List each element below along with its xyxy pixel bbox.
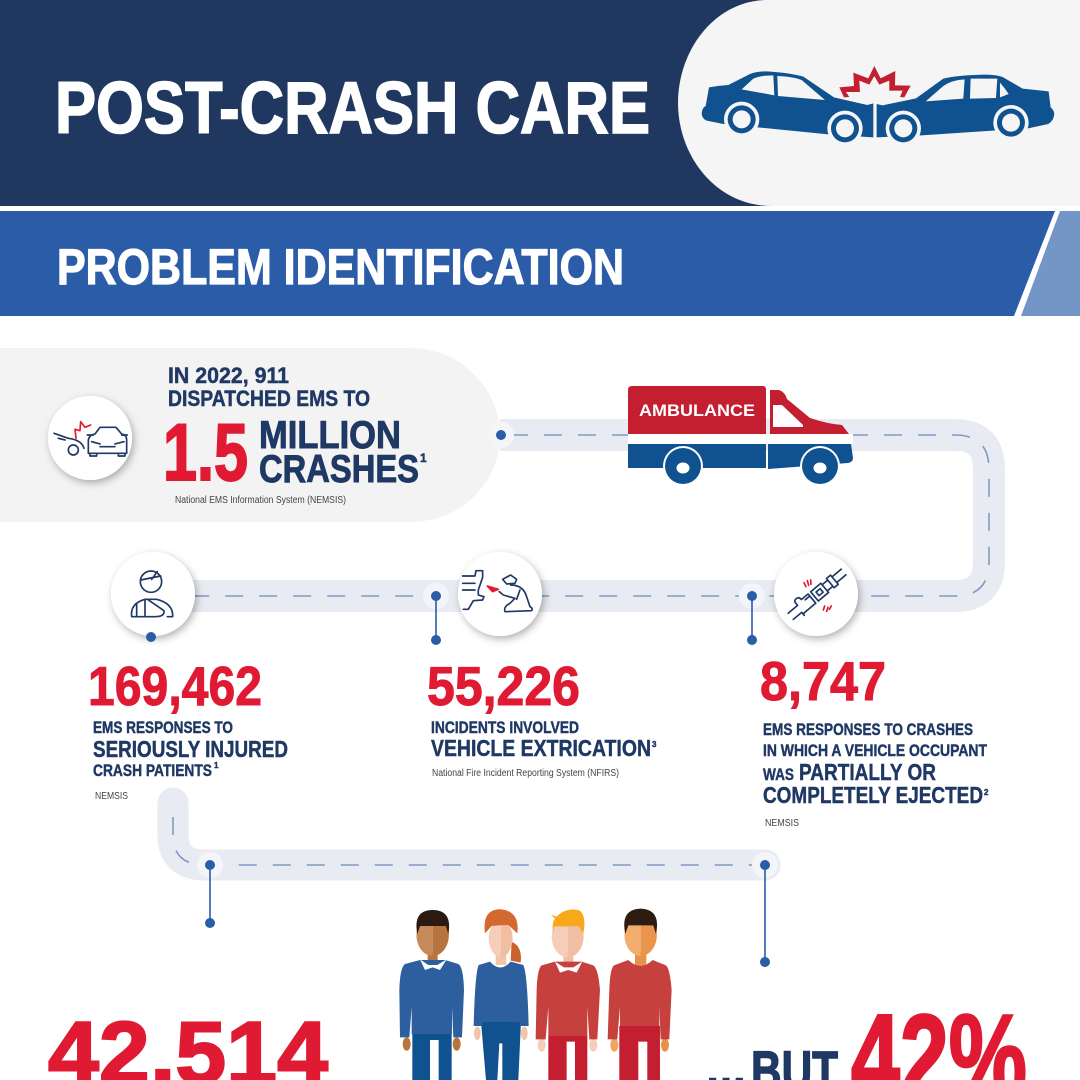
million crashes: CRASHES	[259, 448, 419, 491]
stat: seriously injured: 1	[214, 761, 219, 770]
stat: seriously injured: NEMSIS	[95, 791, 128, 802]
stat: ejected occupants: NEMSIS	[765, 818, 799, 829]
section banner	[0, 211, 1080, 316]
road path lower	[173, 803, 765, 865]
icon: injured person	[111, 552, 195, 636]
stat: vehicle extrication	[427, 655, 657, 779]
title: POST-CRASH CARE	[55, 68, 650, 149]
person 2	[474, 909, 529, 1080]
stat: ejected occupants: COMPLETELY EJECTED	[763, 782, 983, 808]
lead-in text	[168, 363, 370, 411]
panel: 1.5 million crashes	[0, 348, 500, 522]
stat: ejected occupants: WAS	[763, 765, 794, 784]
stat: ejected occupants	[760, 650, 989, 829]
icon: firefighter extricating	[458, 552, 542, 636]
icon: two cars colliding	[702, 66, 1054, 146]
stat: ejected occupants: 2	[984, 788, 989, 797]
person 1	[399, 910, 464, 1080]
stat: ejected occupants: EMS RESPONSES TO CRASHES	[763, 720, 973, 739]
road marker: extrication	[423, 583, 449, 645]
million crashes: MILLION	[259, 414, 401, 457]
million crashes: 1	[420, 451, 427, 465]
icon: four people	[399, 909, 672, 1080]
road marker: start	[488, 422, 514, 448]
icon: broken seat belt	[774, 552, 858, 636]
lead-in text: IN 2022, 911	[168, 363, 289, 388]
person 4	[608, 909, 672, 1080]
road path upper	[170, 435, 989, 596]
stat: seriously injured	[88, 655, 288, 802]
stat: vehicle extrication: National Fire Incident Reporting System (NFIRS)	[432, 768, 619, 779]
lead-in text: DISPATCHED EMS TO	[168, 386, 370, 411]
stat: vehicle extrication: 55,226	[427, 655, 580, 717]
header banner	[0, 0, 1080, 206]
stat: vehicle extrication: VEHICLE EXTRICATION	[431, 735, 651, 761]
section heading: PROBLEM IDENTIFICATION	[57, 239, 624, 295]
stat: seriously injured: SERIOUSLY INJURED	[93, 736, 288, 762]
person 3	[536, 910, 600, 1080]
stat: but 42 percent	[706, 990, 1027, 1080]
source: National EMS Information System (NEMSIS)	[175, 495, 346, 506]
stat: seriously injured: CRASH PATIENTS	[93, 761, 212, 780]
road marker: 42 percent	[752, 852, 778, 967]
icon: car crash	[48, 396, 132, 480]
big number 1.5: 1.5	[163, 408, 248, 498]
stat: vehicle extrication: 3	[652, 740, 657, 749]
stat: seriously injured: EMS RESPONSES TO	[93, 718, 233, 737]
stat: vehicle extrication: INCIDENTS INVOLVED	[431, 718, 579, 737]
stat: ejected occupants: IN WHICH A VEHICLE OCCUPANT	[763, 741, 987, 760]
stat: seriously injured: 169,462	[88, 655, 262, 717]
stat: ejected occupants: 8,747	[760, 650, 886, 712]
road marker: injured	[146, 632, 156, 642]
road marker: deaths	[197, 852, 223, 928]
icon: ambulance	[628, 386, 853, 486]
ambulance label: AMBULANCE	[639, 402, 755, 420]
stat: ejected occupants: PARTIALLY OR	[799, 759, 936, 785]
million crashes	[259, 414, 427, 491]
road marker: ejected	[739, 583, 765, 645]
